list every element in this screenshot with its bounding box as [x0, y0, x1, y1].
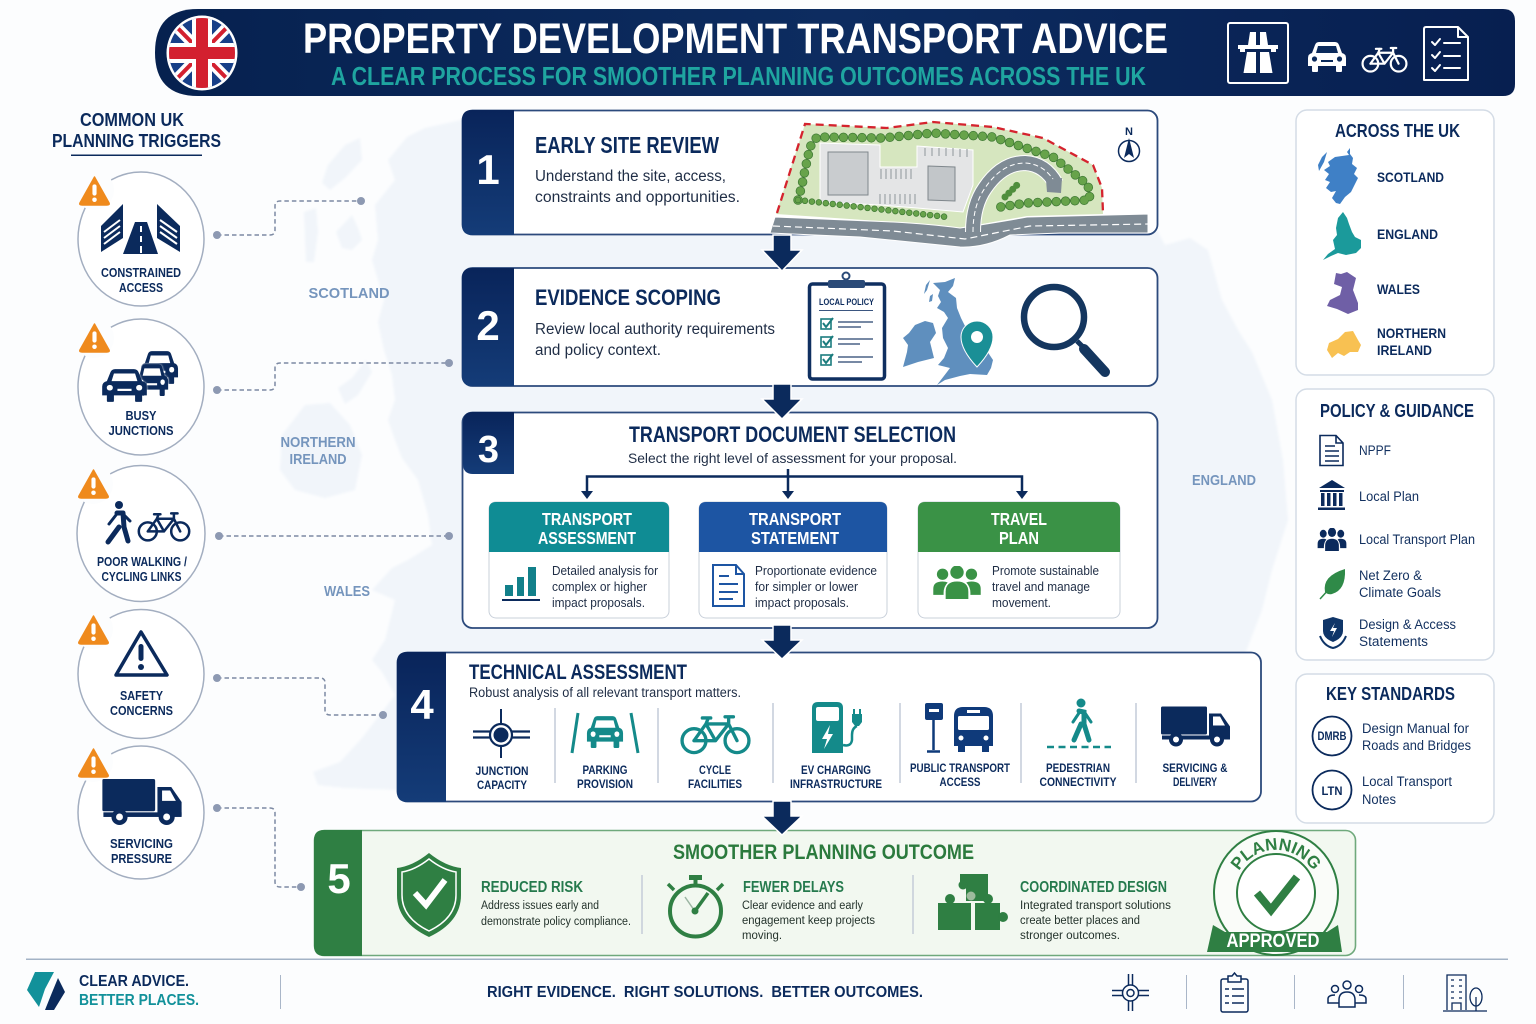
text: complex or higher [552, 579, 648, 594]
icon: UK flag [165, 15, 239, 91]
text: engagement keep projects [742, 915, 875, 927]
label: PEDESTRIAN [1046, 761, 1110, 775]
logo mark [27, 972, 65, 1010]
logo text: CLEAR ADVICE. [79, 973, 189, 990]
heading: TRANSPORT DOCUMENT SELECTION [629, 422, 956, 447]
icon: EV charger [812, 702, 862, 753]
icon: junction [1112, 974, 1149, 1011]
label [110, 837, 173, 866]
heading: KEY STANDARDS [1326, 684, 1455, 704]
label: CONCERNS [110, 704, 173, 718]
card: transport statement: TRANSPORT [749, 509, 841, 529]
label [577, 763, 633, 791]
site plan illustration [770, 122, 1148, 247]
number tab 5 [314, 830, 362, 956]
faint UK background map [280, 110, 1288, 800]
text [1020, 879, 1171, 942]
icon: warning [79, 323, 110, 353]
label [110, 689, 173, 718]
item: LTN [1312, 770, 1452, 810]
icon: north arrow: N [1125, 126, 1133, 138]
text: Proportionate evidence [755, 563, 877, 578]
text [742, 879, 875, 942]
badge: planning approved: PLANNING [1230, 838, 1320, 870]
item: LTN: LTN [1322, 784, 1342, 798]
icon: building and tree [1443, 975, 1487, 1011]
arrow: step 2 to 3 [762, 384, 802, 419]
tagline: RIGHT EVIDENCE. RIGHT SOLUTIONS. BETTER OUTCOMES. [487, 984, 923, 1001]
text [481, 879, 631, 928]
item: Net Zero and Climate Goals: Climate Goals [1359, 585, 1441, 600]
icon: warning [78, 748, 109, 778]
label [910, 761, 1011, 789]
title: PROPERTY DEVELOPMENT TRANSPORT ADVICE [303, 16, 1168, 63]
map label: Scotland: SCOTLAND [308, 285, 390, 302]
panel 1: early site review [462, 110, 1158, 247]
label [108, 409, 174, 438]
badge: planning approved: APPROVED [1226, 930, 1320, 952]
card: transport assessment: ASSESSMENT [538, 528, 636, 548]
footer [26, 958, 1508, 1012]
connectors from triggers [213, 197, 453, 891]
text: travel and manage [992, 579, 1090, 594]
card: travel plan: TRAVEL [991, 509, 1047, 529]
benefit: reduced risk [397, 853, 631, 937]
item: Net Zero and Climate Goals [1320, 568, 1441, 600]
card: transport statement [699, 502, 887, 618]
panel 2: evidence scoping [462, 268, 1158, 386]
number tab 5: 5 [327, 855, 351, 902]
text: create better places and [1020, 915, 1140, 927]
body text: Review local authority requirements [535, 321, 775, 338]
arrow: step 1 to 2 [762, 235, 802, 271]
text: REDUCED RISK [481, 879, 583, 896]
label: SERVICING & [1162, 761, 1228, 775]
item: England [1323, 212, 1438, 260]
label: PUBLIC TRANSPORT [910, 761, 1011, 775]
text: Promote sustainable [992, 563, 1099, 578]
heading: EARLY SITE REVIEW [535, 132, 719, 158]
text: impact proposals. [552, 595, 645, 610]
trigger: poor walking and cycling links [73, 464, 205, 602]
panel: key standards [1296, 674, 1494, 823]
body text: Understand the site, access, [535, 168, 726, 185]
map label: England: ENGLAND [1192, 472, 1256, 489]
icon: shield [397, 853, 461, 937]
item: Local Transport Plan: Local Transport Plan [1359, 532, 1475, 547]
panel 5: smoother planning outcome [314, 830, 1356, 956]
panel 3: transport document selection [462, 412, 1158, 628]
text: FEWER DELAYS [743, 879, 844, 896]
icon: puzzle pieces [938, 874, 1008, 930]
icon: queue of cars [102, 351, 178, 402]
map label: Northern Ireland: NORTHERN [280, 434, 356, 451]
label [1162, 761, 1228, 789]
trigger: constrained access [74, 170, 204, 306]
item: DMRB: Roads and Bridges [1362, 738, 1471, 753]
label: CYCLE [699, 763, 731, 777]
benefit: coordinated design [938, 874, 1171, 942]
icon: parking bay [572, 713, 638, 753]
label: SERVICING [110, 837, 173, 851]
label [101, 266, 181, 295]
icon: stopwatch [668, 875, 723, 936]
label: BUSY [126, 409, 157, 423]
icon: motorway sign [1228, 23, 1288, 83]
icon: magnifying glass [1024, 287, 1105, 372]
item: public transport access [910, 703, 1011, 789]
icon: clipboard [1221, 973, 1248, 1012]
map label: Northern Ireland [280, 434, 356, 468]
icon: bus stop and bus [925, 703, 993, 752]
panel: across the UK [1296, 110, 1494, 375]
item: Northern Ireland: NORTHERN [1377, 326, 1446, 341]
icon: hazard triangle [116, 632, 167, 675]
text: Detailed analysis for [552, 563, 659, 578]
branching arrows [581, 469, 1028, 499]
item: LTN: Local Transport [1362, 774, 1452, 789]
item: Design and Access Statements: Statements [1359, 634, 1428, 649]
subheading: Robust analysis of all relevant transport matters. [469, 685, 741, 700]
item: Local Plan: Local Plan [1359, 489, 1419, 504]
subtitle: A CLEAR PROCESS FOR SMOOTHER PLANNING OUTCOMES ACROSS THE UK [331, 63, 1146, 91]
icon: truck [102, 779, 182, 825]
badge: planning approved [1207, 830, 1342, 956]
benefit: fewer delays [668, 875, 875, 942]
label: PARKING [582, 763, 628, 777]
text: Integrated transport solutions [1020, 900, 1171, 912]
item: parking provision [572, 713, 638, 791]
label: DELIVERY [1173, 775, 1217, 789]
arrow: step 3 to 4 [762, 625, 802, 659]
card: travel plan [918, 502, 1120, 618]
icon: bicycle [138, 512, 190, 542]
text: for simpler or lower [755, 579, 859, 594]
label: INFRASTRUCTURE [790, 777, 882, 791]
item: DMRB [1312, 716, 1471, 756]
arrow: step 4 to 5 [762, 801, 802, 835]
text: Address issues early and [481, 900, 599, 912]
text: moving. [742, 930, 782, 942]
label: SAFETY [120, 689, 164, 703]
text: movement. [992, 595, 1051, 610]
label: ACCESS [119, 281, 163, 295]
label: PROVISION [577, 777, 633, 791]
icon: junction [473, 709, 530, 758]
item: cycle facilities [682, 717, 749, 791]
text [552, 563, 659, 610]
label [97, 555, 187, 584]
text: COORDINATED DESIGN [1020, 879, 1167, 896]
icon: UK map with pin [903, 278, 993, 385]
item: servicing and delivery [1161, 706, 1230, 789]
label: CAPACITY [477, 778, 527, 792]
icon: bicycle [680, 715, 751, 754]
number tab 1: 1 [476, 146, 500, 193]
heading: ACROSS THE UK [1335, 121, 1460, 141]
label: FACILITIES [688, 777, 742, 791]
trigger: busy junctions [74, 318, 204, 455]
body text [535, 321, 775, 359]
body text [535, 168, 740, 206]
heading: common UK planning triggers [52, 109, 221, 156]
panel: policy and guidance [1296, 389, 1494, 660]
icon: people [933, 566, 981, 599]
item: EV charging infrastructure [790, 702, 882, 791]
icon: document [713, 565, 744, 606]
label: JUNCTION [476, 764, 528, 778]
number tab 3: 3 [478, 429, 499, 471]
trigger: servicing pressure [73, 742, 204, 879]
body text: constraints and opportunities. [535, 189, 740, 206]
icon: warning [78, 615, 109, 645]
panel 4: technical assessment [397, 652, 1261, 802]
item: Northern Ireland [1327, 326, 1446, 358]
label [1040, 761, 1116, 789]
label: CYCLING LINKS [102, 570, 182, 584]
item: England: ENGLAND [1377, 227, 1438, 242]
number tab 4 [397, 652, 446, 802]
map label: Northern Ireland: IRELAND [290, 451, 347, 468]
heading: common UK planning triggers: PLANNING TRIGGERS [52, 130, 221, 151]
item: Design and Access Statements: Design & Access [1359, 617, 1456, 632]
item: NPPF [1320, 436, 1391, 466]
icon: pedestrian [108, 501, 130, 542]
item: Wales: WALES [1377, 282, 1420, 297]
heading: EVIDENCE SCOPING [535, 285, 721, 310]
item: DMRB: Design Manual for [1362, 721, 1469, 736]
label: ACCESS [940, 775, 980, 789]
item: Net Zero and Climate Goals: Net Zero & [1359, 568, 1422, 583]
item: DMRB: DMRB [1318, 731, 1346, 743]
icon: local policy clipboard [810, 272, 884, 379]
icon: local policy clipboard: LOCAL POLICY [819, 297, 875, 308]
heading: SMOOTHER PLANNING OUTCOME [673, 840, 974, 864]
map label: Wales: WALES [324, 583, 370, 600]
icon: bicycle [1361, 46, 1408, 73]
icon: warning [79, 176, 110, 206]
number tab 3 [463, 412, 514, 474]
icon: bar chart [502, 567, 540, 601]
label: EV CHARGING [801, 763, 871, 777]
item: Local Transport Plan [1318, 528, 1475, 551]
card: transport statement: STATEMENT [751, 528, 839, 548]
icon: checklist document [1424, 27, 1468, 80]
label: CONSTRAINED [101, 266, 181, 280]
trigger: safety concerns [73, 609, 204, 738]
icon: truck [1161, 706, 1230, 746]
text: demonstrate policy compliance. [481, 916, 631, 928]
item: LTN: Notes [1362, 792, 1396, 807]
icon: north arrow [1118, 126, 1140, 162]
item: Scotland [1318, 148, 1444, 204]
card: transport assessment: TRANSPORT [542, 509, 632, 529]
text [992, 563, 1099, 610]
item: junction capacity [473, 709, 530, 792]
number tab 2: 2 [476, 302, 500, 349]
label [476, 764, 528, 792]
number tab 4: 4 [410, 681, 434, 728]
label: JUNCTIONS [108, 424, 174, 438]
subheading: Select the right level of assessment for your proposal. [628, 450, 957, 466]
label: PRESSURE [111, 852, 172, 866]
card: travel plan: PLAN [999, 528, 1039, 548]
label: POOR WALKING / [97, 555, 187, 569]
number tab 2 [462, 268, 514, 386]
item: pedestrian connectivity [1040, 698, 1116, 789]
header banner [155, 9, 1515, 96]
item: Wales [1327, 272, 1420, 314]
item: Scotland: SCOTLAND [1377, 170, 1444, 185]
text: Clear evidence and early [742, 900, 863, 912]
text [755, 563, 877, 610]
icon: pedestrian [1047, 698, 1111, 747]
icon: people group [1328, 981, 1366, 1007]
logo text: BETTER PLACES. [79, 992, 199, 1009]
icon: road with barriers [101, 204, 180, 254]
heading: POLICY & GUIDANCE [1320, 401, 1474, 421]
heading: TECHNICAL ASSESSMENT [469, 661, 687, 684]
icon: car [1308, 42, 1346, 72]
item: Local Plan [1318, 480, 1419, 510]
heading: common UK planning triggers: COMMON UK [80, 109, 185, 130]
logo text [79, 973, 199, 1009]
item: NPPF: NPPF [1359, 443, 1391, 458]
label [790, 763, 882, 791]
card: transport assessment [489, 502, 669, 618]
body text: and policy context. [535, 342, 661, 359]
text: stronger outcomes. [1020, 930, 1120, 942]
text: impact proposals. [755, 595, 849, 610]
label [688, 763, 742, 791]
icon: warning [78, 469, 109, 499]
item: Design and Access Statements [1320, 617, 1456, 649]
label: CONNECTIVITY [1040, 775, 1116, 789]
number tab 1 [462, 110, 514, 235]
item: Northern Ireland: IRELAND [1377, 343, 1432, 358]
